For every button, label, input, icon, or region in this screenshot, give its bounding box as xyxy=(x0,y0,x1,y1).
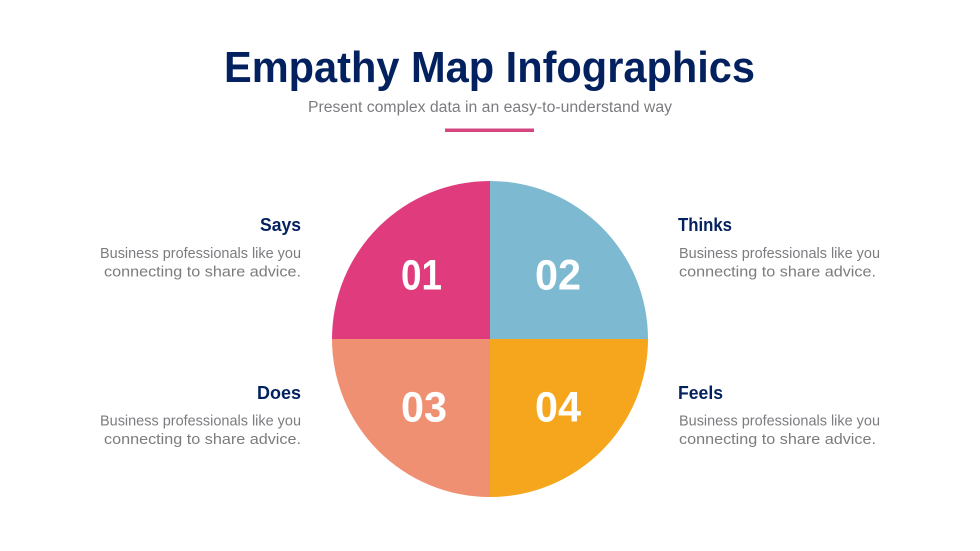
text block: Feels: Business professionals like you xyxy=(679,412,880,430)
subtitle: Present complex data in an easy-to-understand way xyxy=(308,99,672,116)
text block: Does xyxy=(100,383,301,448)
segment 04: 04 xyxy=(535,384,581,432)
title: Empathy Map Infographics xyxy=(224,43,755,92)
segment 01: 01 xyxy=(401,252,442,300)
text block: Thinks: connecting to share advice. xyxy=(679,264,876,280)
text block: Says: Business professionals like you xyxy=(100,245,301,262)
pie chart xyxy=(332,181,648,497)
text block: Says xyxy=(100,215,301,280)
text block: Feels: connecting to share advice. xyxy=(679,431,876,448)
segment 04 xyxy=(490,339,648,497)
text block: Says: Says xyxy=(260,215,301,235)
text block: Thinks: Thinks xyxy=(678,215,732,235)
segment 01 xyxy=(332,181,490,339)
text block: Feels xyxy=(678,383,880,448)
title underline accent xyxy=(445,128,534,132)
text block: Says: connecting to share advice. xyxy=(104,264,301,280)
segment 02: 02 xyxy=(535,252,581,300)
text block: Feels: Feels xyxy=(678,383,723,403)
segment 03 xyxy=(332,339,490,497)
text block: Does: connecting to share advice. xyxy=(104,431,301,448)
text block: Does: Business professionals like you xyxy=(100,412,301,430)
text block: Thinks xyxy=(678,215,880,280)
segment 02 xyxy=(490,181,648,339)
text block: Thinks: Business professionals like you xyxy=(679,245,880,262)
segment 03: 03 xyxy=(401,384,447,432)
text block: Does: Does xyxy=(257,383,301,403)
